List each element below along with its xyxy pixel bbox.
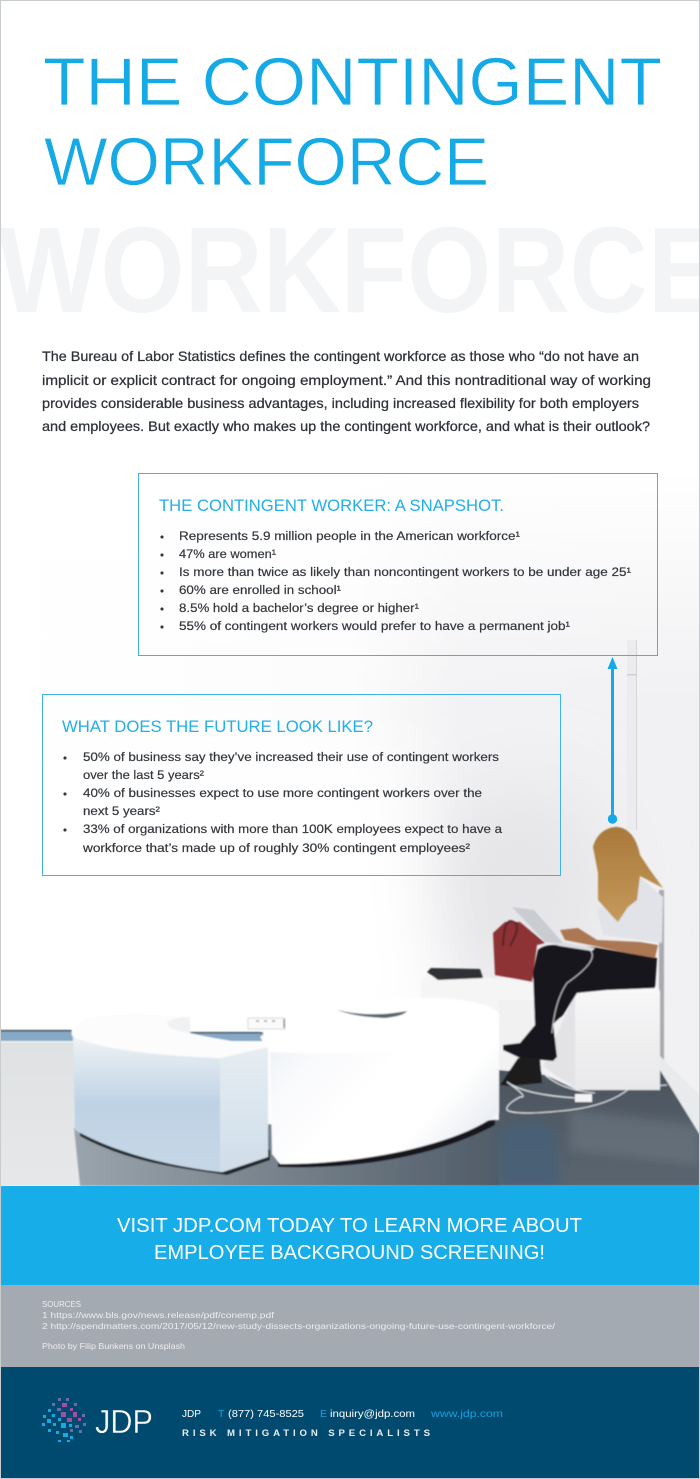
intro paragraph: The Bureau of Labor Statistics defines the contingent workforce as those who “do not have an	[42, 349, 639, 364]
title: WORKFORCE	[44, 125, 489, 200]
contact line: inquiry@jdp.com	[330, 1409, 415, 1420]
future heading: WHAT DOES THE FUTURE LOOK LIKE?	[62, 718, 373, 736]
icon: JDP logo dots	[42, 1398, 86, 1442]
call to action banner: VISIT JDP.COM TODAY TO LEARN MORE ABOUT	[117, 1215, 582, 1237]
intro paragraph: and employees. But exactly who makes up the contingent workforce, and what is their outlook?	[42, 419, 650, 434]
snapshot bullets	[160, 529, 631, 633]
future bullets: over the last 5 years²	[83, 768, 204, 782]
contact line	[182, 1409, 503, 1420]
seat cube	[543, 986, 660, 1090]
snapshot bullets: 8.5% hold a bachelor’s degree or higher¹	[179, 601, 419, 615]
floor	[0, 1042, 80, 1186]
cables	[507, 1073, 667, 1113]
sources panel: 1 https://www.bls.gov/news.release/pdf/conemp.pdf	[42, 1310, 275, 1320]
sources panel: Photo by Filip Bunkens on Unsplash	[42, 1341, 185, 1351]
right sofa	[248, 998, 499, 1167]
laptop	[512, 907, 595, 948]
sources panel	[0, 1285, 700, 1367]
skirt and legs	[533, 945, 657, 1025]
floor strip behind sofas	[0, 1030, 73, 1041]
intro paragraph: provides considerable business advantages, including increased flexibility for both employers	[42, 396, 639, 411]
call to action banner: EMPLOYEE BACKGROUND SCREENING!	[154, 1242, 545, 1264]
panel: snapshot	[138, 474, 658, 656]
snapshot heading: THE CONTINGENT WORKER: A SNAPSHOT.	[159, 497, 504, 515]
title: THE CONTINGENT	[43, 45, 662, 120]
contact line: www.jdp.com	[430, 1409, 503, 1420]
snapshot bullets: Is more than twice as likely than noncontingent workers to be under age 25¹	[179, 565, 631, 579]
clutch	[427, 968, 483, 980]
arrow	[608, 657, 618, 824]
wall corner shadow	[659, 890, 664, 1060]
contact line: (877) 745-8525	[228, 1409, 304, 1420]
logo wordmark: JDP	[95, 1403, 153, 1440]
future bullets: 50% of business say they’ve increased their use of contingent workers	[83, 750, 499, 764]
future bullets: 40% of businesses expect to use more contingent workers over the	[83, 786, 482, 800]
future bullets: workforce that’s made up of roughly 30% contingent employees²	[82, 841, 470, 855]
intro paragraph: implicit or explicit contract for ongoing employment.” And this nontraditional way of working	[42, 373, 651, 388]
left sofa	[72, 1014, 270, 1175]
bench	[421, 976, 560, 1072]
title	[43, 45, 662, 200]
socket	[248, 1018, 285, 1029]
snapshot bullets: 55% of contingent workers would prefer to have a permanent job¹	[179, 619, 570, 633]
future bullets: 33% of organizations with more than 100K employees expect to have a	[83, 822, 502, 836]
contact line: JDP	[182, 1409, 201, 1420]
sources panel: 2 http://spendmatters.com/2017/05/12/new-study-dissects-organizations-ongoing-future-use-contingent-workforce/	[42, 1321, 556, 1331]
photo: woman on white seating	[0, 470, 700, 1186]
baseboard	[660, 1056, 700, 1135]
panel: future	[42, 694, 560, 876]
sources panel: SOURCES	[42, 1299, 81, 1309]
arm	[560, 928, 658, 958]
call to action banner	[0, 1186, 700, 1285]
snapshot bullets: Represents 5.9 million people in the American workforce¹	[179, 529, 520, 543]
snapshot bullets: 60% are enrolled in school¹	[179, 583, 341, 597]
snapshot bullets: 47% are women¹	[179, 547, 276, 561]
wall	[0, 470, 700, 1186]
tagline: RISK MITIGATION SPECIALISTS	[182, 1428, 431, 1439]
contact line: E	[320, 1409, 327, 1420]
intro paragraph	[42, 349, 651, 434]
boots	[503, 970, 557, 1061]
contact line: T	[218, 1409, 225, 1420]
footer	[0, 1367, 700, 1479]
future bullets	[64, 750, 502, 855]
red bag	[493, 922, 545, 982]
shirt	[597, 877, 663, 943]
hair	[593, 827, 663, 922]
future bullets: next 5 years²	[83, 804, 160, 818]
